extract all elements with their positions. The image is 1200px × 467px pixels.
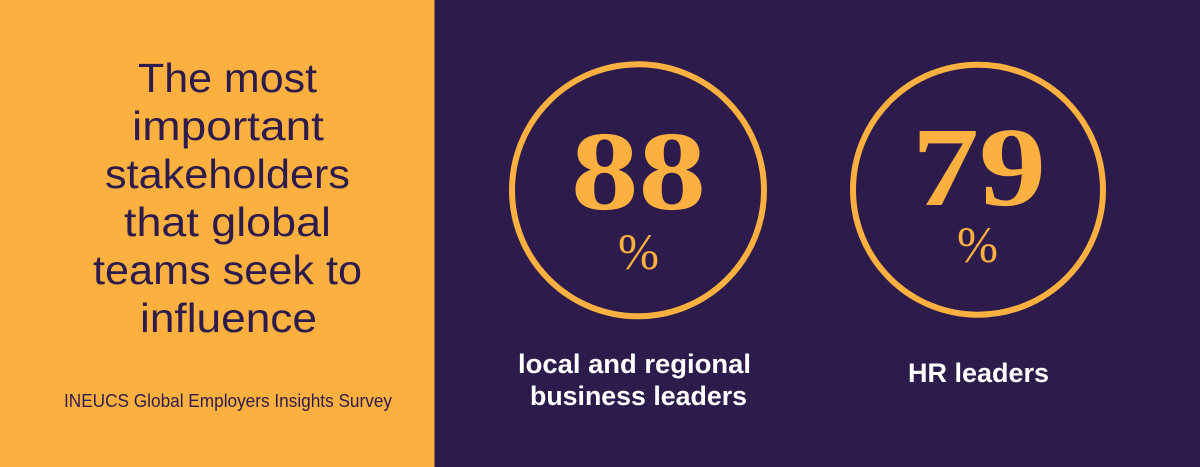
label: HR leaders: HR leaders (908, 358, 1049, 388)
heading (93, 55, 362, 341)
number: 79: 79 (912, 105, 1046, 230)
heading: influence (140, 295, 317, 341)
percent sign: 88: % (618, 225, 659, 281)
number: 88: 88 (571, 109, 706, 234)
heading: The most (138, 55, 318, 101)
stat: 88 percent (512, 64, 764, 316)
heading: teams seek to (93, 247, 362, 293)
heading: that global (124, 199, 331, 245)
stat: 79 percent (853, 65, 1103, 315)
panel: purple right background (434, 0, 1200, 467)
percent sign: 79: % (957, 218, 998, 274)
source text: INEUCS Global Employers Insights Survey (64, 391, 392, 411)
panel: orange left background (0, 0, 434, 467)
circle ring: 88 percent (512, 64, 764, 316)
heading: stakeholders (105, 151, 350, 197)
label: local and regional business leaders: business leaders (530, 381, 747, 411)
circle ring: 79 percent (853, 65, 1103, 315)
label: local and regional business leaders (518, 349, 751, 411)
label: local and regional business leaders: local and regional (518, 349, 751, 379)
heading: important (132, 103, 325, 149)
